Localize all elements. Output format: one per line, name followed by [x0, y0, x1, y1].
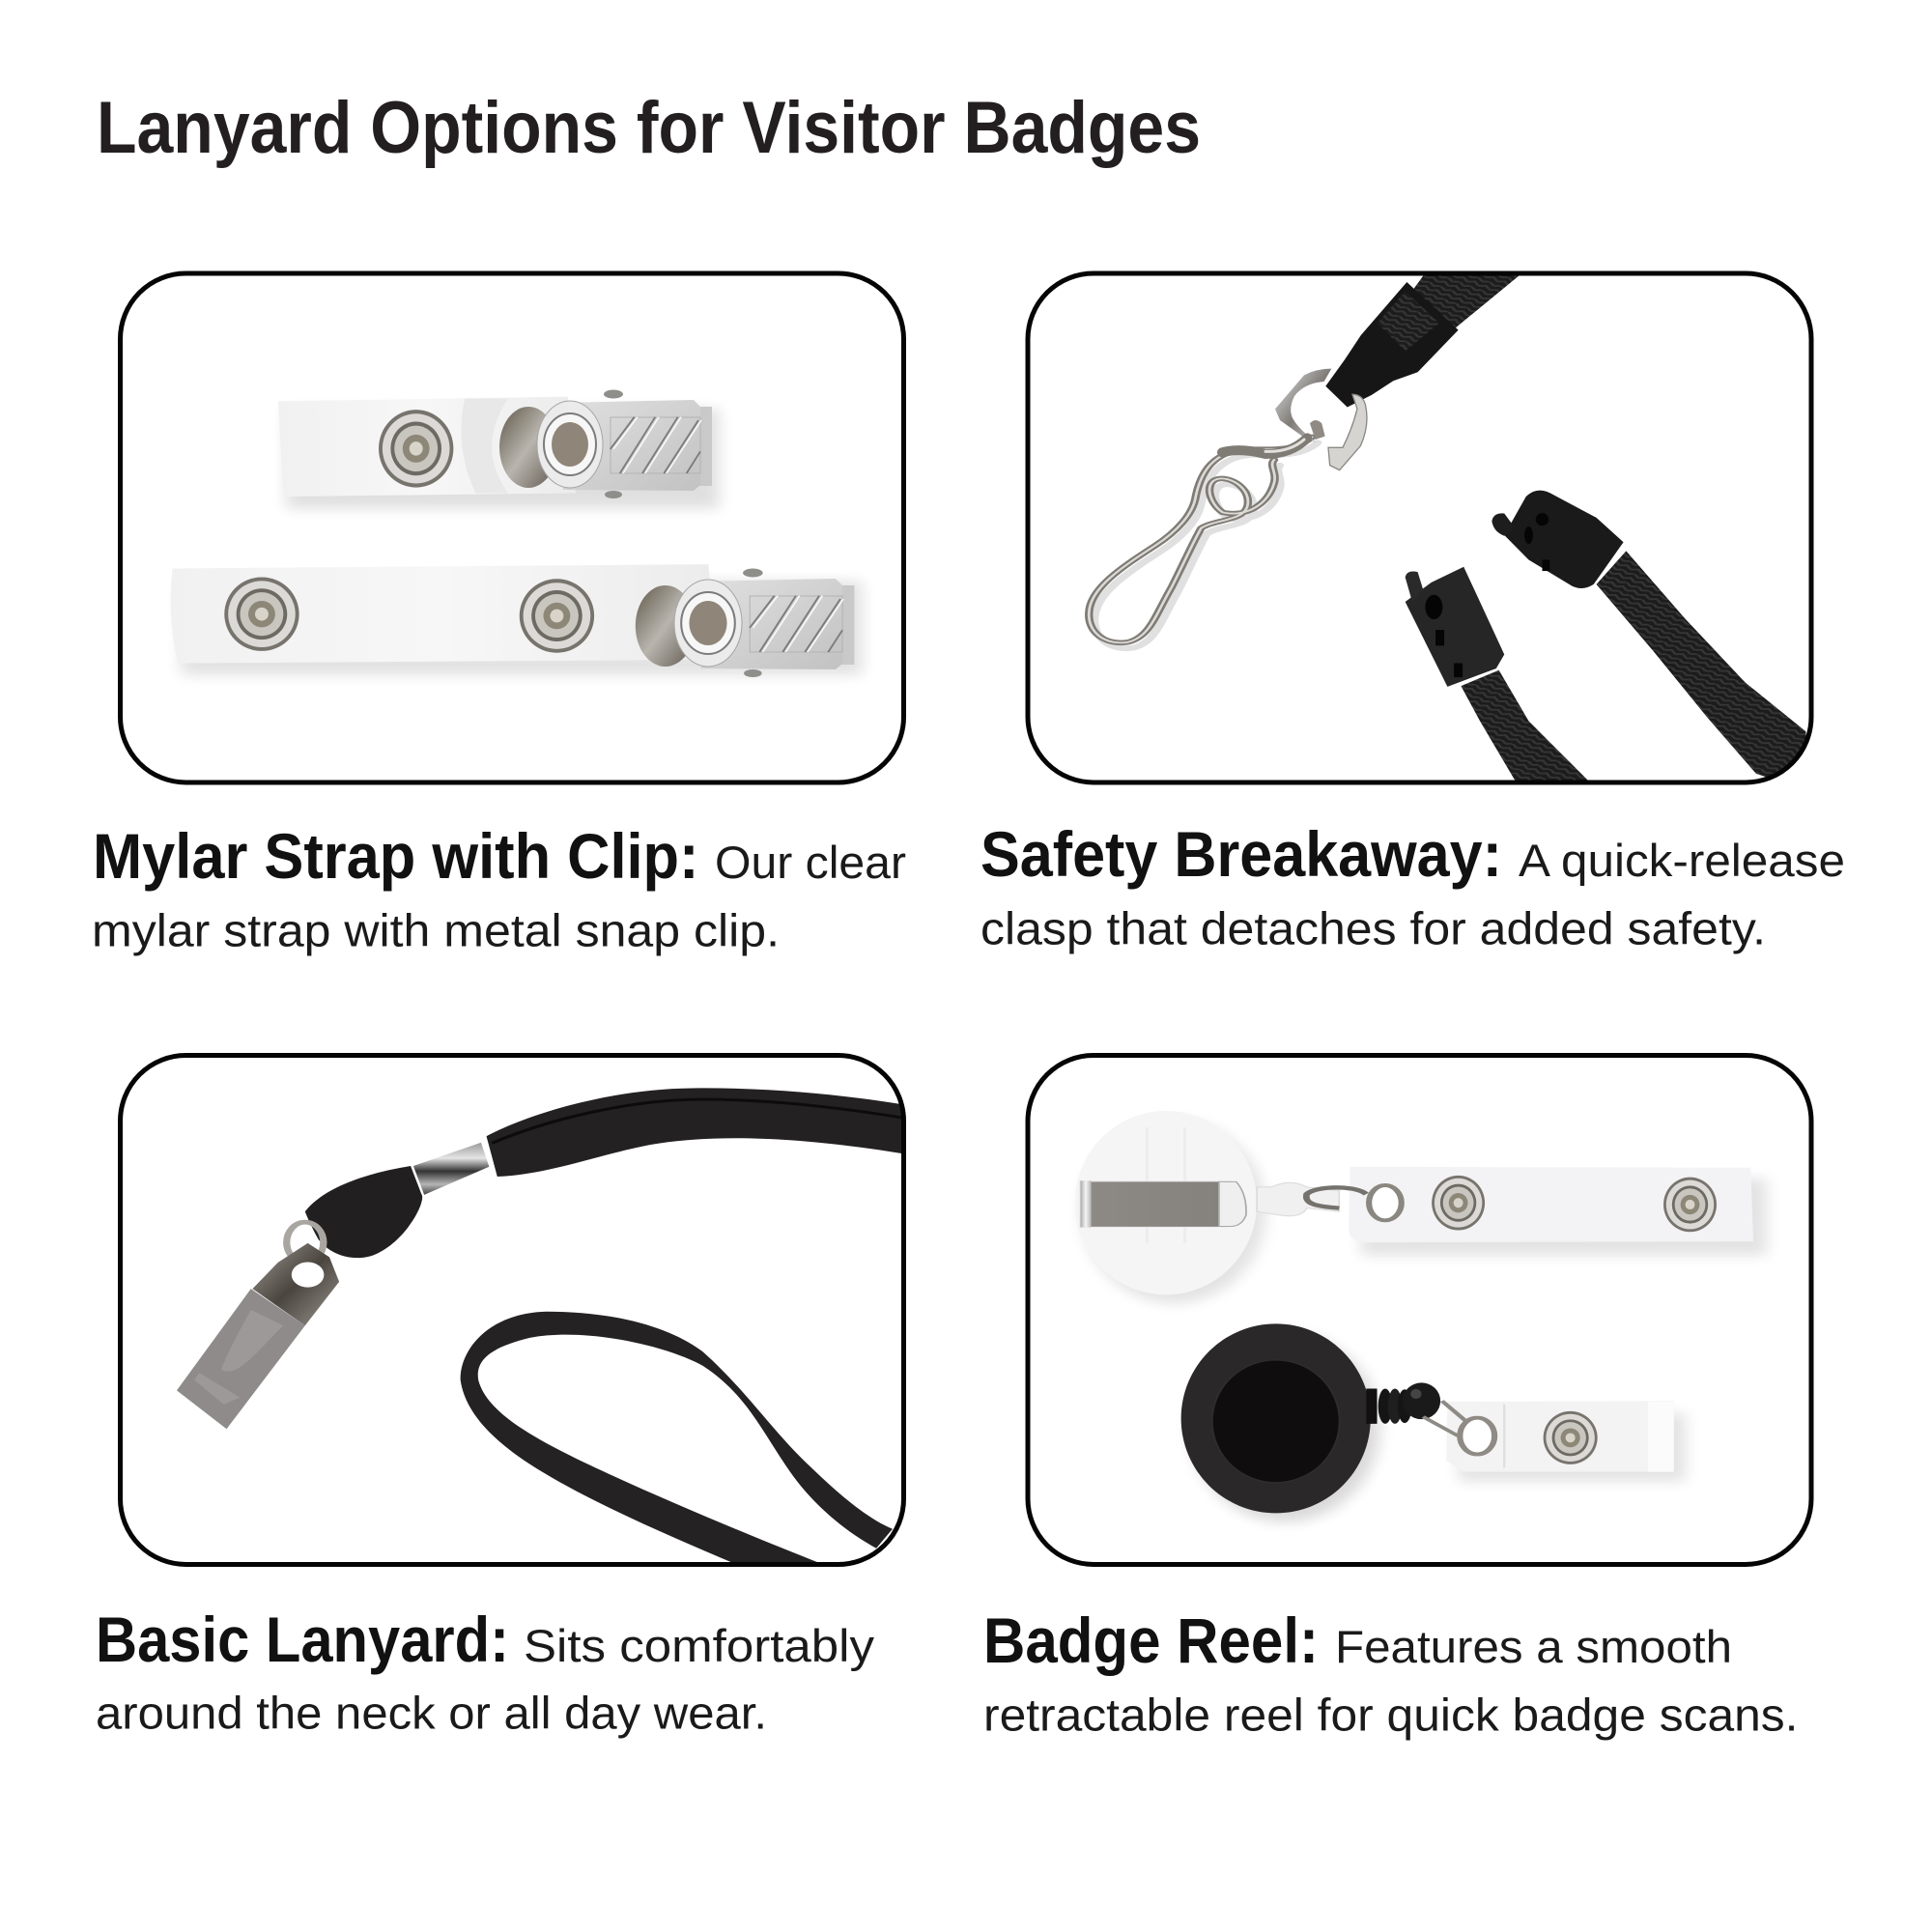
- Basic lanyard caption: around the neck or all day wear.: [96, 1687, 767, 1739]
- Mylar strap caption: mylar strap with metal snap clip.: [92, 904, 780, 956]
- Badge reel caption: Features a smooth: [1335, 1621, 1732, 1672]
- Basic lanyard caption: [96, 1604, 875, 1739]
- panel: mylar strap with clip: [120, 273, 904, 782]
- Badge reel caption: retractable reel for quick badge scans.: [983, 1689, 1799, 1741]
- panel border: [120, 273, 904, 782]
- short mylar strap: [278, 397, 720, 509]
- folded lanyard loop: [305, 1166, 422, 1258]
- panel: safety breakaway: [1028, 272, 1811, 782]
- split ring: [287, 1222, 324, 1263]
- short strap metal clip: [499, 390, 712, 498]
- left strap with breakaway clasp: [1406, 567, 1588, 781]
- Basic lanyard caption: Basic Lanyard:: [96, 1604, 509, 1675]
- panel border: [1028, 1055, 1811, 1565]
- upper lanyard band: [487, 1088, 914, 1177]
- panel: basic lanyard: [120, 1055, 914, 1565]
- Safety breakaway caption: Safety Breakaway:: [980, 818, 1502, 890]
- Mylar strap caption: Our clear: [715, 837, 906, 888]
- black reel mylar strap: [1423, 1401, 1686, 1482]
- metal hook wire: [1089, 437, 1318, 648]
- metal crimp: [413, 1143, 489, 1195]
- Safety breakaway caption: A quick-release: [1519, 835, 1845, 886]
- right strap with breakaway clasp: [1492, 491, 1805, 779]
- swivel D-ring: [1222, 369, 1367, 470]
- panel border: [1028, 273, 1811, 782]
- title: Lanyard Options for Visitor Badges: [97, 87, 1201, 169]
- metal bulldog clip: [177, 1243, 339, 1429]
- panel: badge reel: [1028, 1055, 1811, 1565]
- long mylar strap: [171, 564, 863, 675]
- long strap metal clip: [636, 568, 854, 677]
- white badge reel: [1075, 1111, 1339, 1303]
- lower lanyard loop: [461, 1312, 893, 1564]
- Mylar strap caption: Mylar Strap with Clip:: [93, 820, 699, 892]
- Safety breakaway caption: [980, 818, 1845, 954]
- Badge reel caption: [983, 1605, 1799, 1741]
- black badge reel: [1181, 1323, 1440, 1521]
- Safety breakaway caption: clasp that detaches for added safety.: [980, 902, 1766, 954]
- panel border: [120, 1055, 904, 1565]
- Basic lanyard caption: Sits comfortably: [524, 1620, 875, 1671]
- Badge reel caption: Badge Reel:: [983, 1605, 1319, 1676]
- white reel mylar strap: [1306, 1167, 1767, 1256]
- upper lanyard strap with buckle: [1325, 272, 1523, 408]
- Mylar strap caption: [92, 820, 906, 956]
